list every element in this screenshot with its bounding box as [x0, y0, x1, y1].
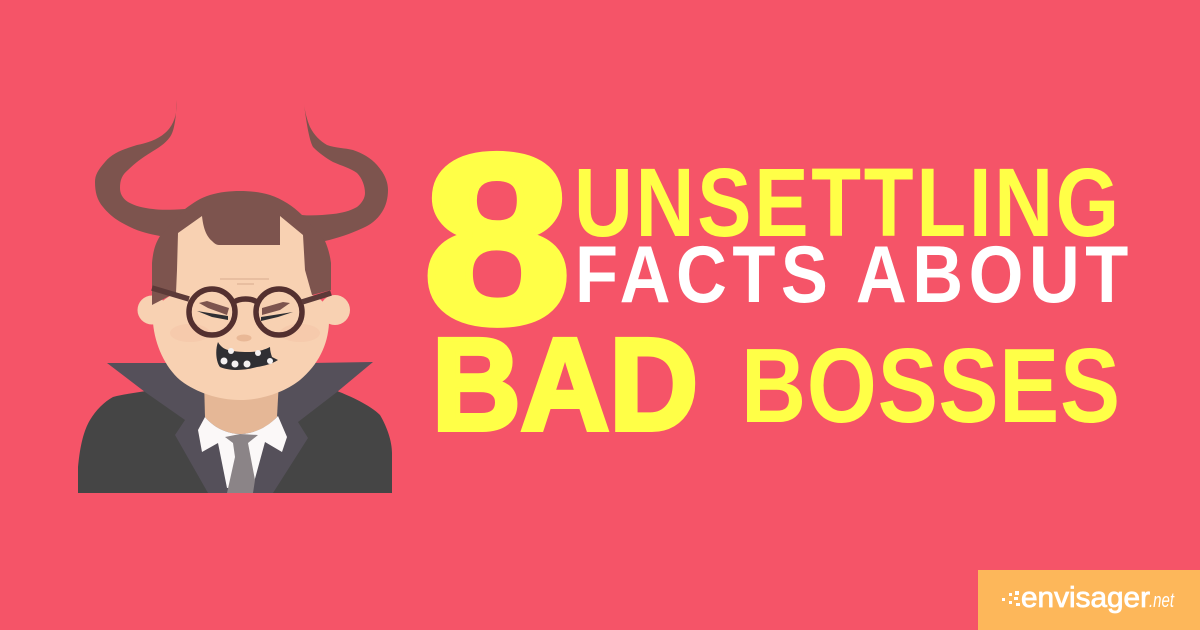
cape collar and lapels [107, 362, 373, 493]
glasses [152, 288, 331, 335]
face [153, 216, 329, 400]
heading: FACTS ABOUT: FACTS ABOUT [575, 229, 1128, 320]
tie [225, 434, 258, 493]
ear: left [138, 296, 166, 324]
mouth [216, 342, 278, 370]
heading: numeral 8: 8 [423, 105, 571, 373]
cheeks [170, 324, 320, 342]
icon: right horn [295, 104, 388, 241]
ear: right [320, 295, 350, 325]
closed eyes [197, 311, 293, 321]
jacket [78, 391, 392, 493]
eyebrows [199, 301, 290, 315]
neck [204, 380, 279, 434]
illustration: devil boss [78, 100, 392, 493]
nose [236, 334, 252, 342]
logo: envisager.net [978, 570, 1200, 630]
heading: UNSETTLING: UNSETTLING [574, 148, 1119, 257]
shirt [198, 416, 287, 488]
icon: left horn [95, 100, 195, 236]
logo suffix: .net [1149, 590, 1175, 612]
forehead wrinkles [220, 279, 269, 284]
heading: BAD: BAD [432, 310, 698, 458]
logo wordmark: envisager [1021, 582, 1150, 614]
logo dots [1002, 591, 1020, 606]
heading: BOSSES: BOSSES [741, 326, 1120, 445]
hair [152, 191, 331, 305]
